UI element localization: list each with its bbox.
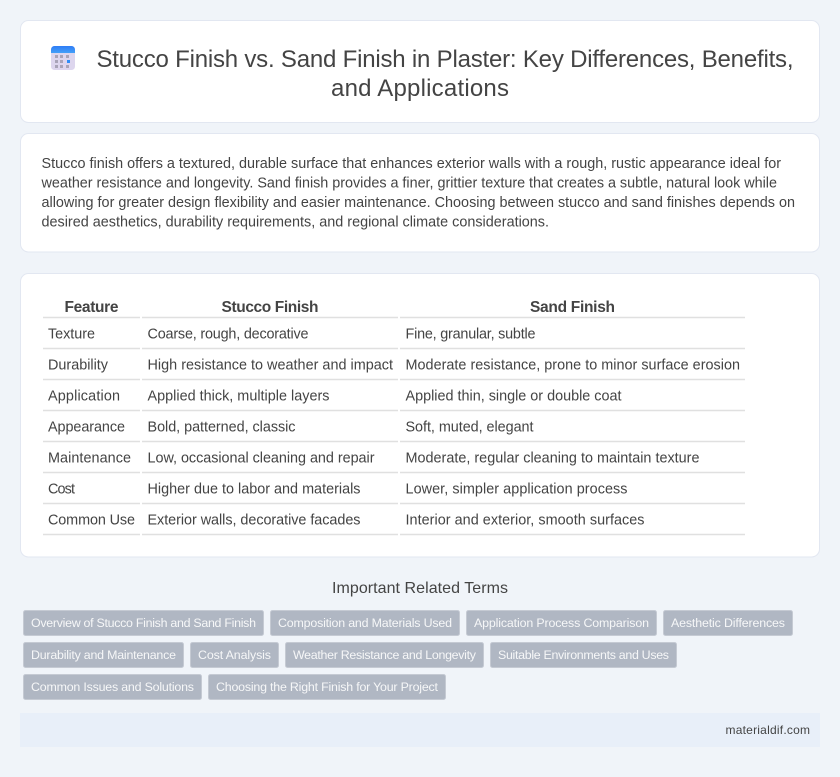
row: durability	[43, 358, 745, 380]
tag: Aesthetic Differences	[671, 616, 785, 630]
tag	[490, 642, 676, 668]
table header: Sand Finish	[530, 299, 615, 316]
row: cost: Higher due to labor and materials	[148, 482, 360, 498]
tag	[270, 610, 460, 636]
footer	[20, 713, 820, 747]
tag: Composition and Materials Used	[278, 616, 452, 630]
row: application: Applied thick, multiple layers	[148, 388, 330, 404]
row: application	[43, 388, 745, 410]
row: texture: Fine, granular, subtle	[406, 326, 536, 342]
tag: Choosing the Right Finish for Your Project	[216, 680, 439, 694]
row: texture: Coarse, rough, decorative	[148, 326, 308, 342]
tag	[190, 642, 278, 668]
row: maintenance	[43, 450, 745, 472]
row: appearance: Soft, muted, elegant	[406, 420, 534, 436]
panel: intro	[20, 134, 820, 252]
tag: Weather Resistance and Longevity	[293, 648, 477, 662]
tag	[466, 610, 656, 636]
footer: materialdif.com	[726, 723, 810, 737]
tag	[24, 642, 184, 668]
row: common use	[43, 512, 745, 534]
intro text: desired aesthetics, durability requirements, and regional climate considerations.	[42, 214, 549, 230]
row: maintenance: Maintenance	[48, 450, 131, 466]
intro text: allowing for greater design flexibility and easier maintenance. Choosing between stucco and sand finishes depends on	[42, 195, 795, 211]
tag: Durability and Maintenance	[31, 648, 176, 662]
row: common use: Common Use	[48, 512, 135, 528]
tag	[664, 610, 792, 636]
heading: related terms: Important Related Terms	[332, 580, 508, 597]
row: durability: High resistance to weather and impact	[148, 358, 393, 374]
row: appearance: Bold, patterned, classic	[148, 420, 296, 436]
row: common use: Exterior walls, decorative facades	[148, 512, 360, 528]
row: durability: Durability	[48, 358, 109, 374]
title	[96, 46, 794, 102]
row: texture	[43, 326, 745, 348]
panel: header	[20, 20, 820, 122]
tags: related terms	[24, 610, 792, 700]
tag: Application Process Comparison	[474, 616, 649, 630]
row: cost	[43, 482, 745, 504]
tag: Overview of Stucco Finish and Sand Finish	[31, 616, 256, 630]
row: cost: Lower, simpler application process	[406, 482, 628, 498]
row: cost: Cost	[48, 482, 75, 498]
intro text: weather resistance and longevity. Sand finish provides a finer, grittier texture that creates a subtle, natural look while	[40, 175, 777, 191]
icon: calendar	[51, 46, 75, 70]
table header: Stucco Finish	[222, 299, 318, 316]
tag	[24, 610, 264, 636]
row: application: Application	[48, 388, 120, 404]
table header: Feature	[64, 299, 119, 316]
row: texture: Texture	[48, 326, 95, 342]
tag: Suitable Environments and Uses	[498, 648, 669, 662]
row: durability: Moderate resistance, prone to minor surface erosion	[406, 358, 740, 374]
title: and Applications	[331, 75, 509, 102]
row: application: Applied thin, single or double coat	[406, 388, 622, 404]
panel: comparison table	[20, 274, 820, 557]
row: maintenance: Moderate, regular cleaning to maintain texture	[406, 450, 700, 466]
intro text: Stucco finish offers a textured, durable surface that enhances exterior walls with a rough, rustic appearance ideal for	[42, 156, 781, 172]
row: maintenance: Low, occasional cleaning and repair	[148, 450, 375, 466]
tag	[286, 642, 484, 668]
tag	[24, 674, 202, 700]
tag: Cost Analysis	[198, 648, 271, 662]
row: appearance: Appearance	[48, 420, 125, 436]
row: appearance	[43, 420, 745, 442]
tag: Common Issues and Solutions	[31, 680, 194, 694]
row: common use: Interior and exterior, smooth surfaces	[406, 512, 644, 528]
intro text	[40, 156, 795, 230]
tag	[208, 674, 446, 700]
table header	[43, 299, 745, 318]
title: Stucco Finish vs. Sand Finish in Plaster: Key Differences, Benefits,	[96, 46, 794, 73]
